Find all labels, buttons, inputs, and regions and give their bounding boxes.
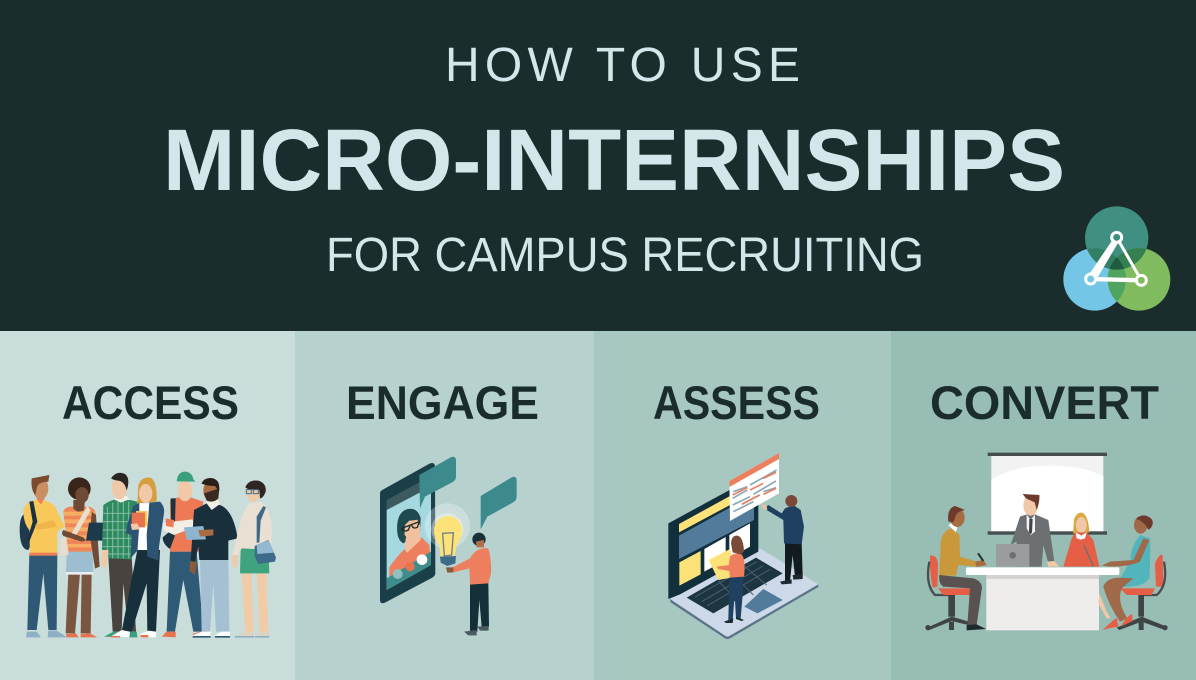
laptop	[668, 474, 818, 639]
subtitle: for campus recruiting: FOR CAMPUS RECRUITING	[326, 229, 924, 282]
student 2	[60, 477, 117, 637]
table	[966, 567, 1119, 630]
man	[446, 533, 491, 635]
projector screen	[988, 453, 1107, 535]
speech bubble right	[481, 477, 517, 529]
presenter	[1011, 494, 1059, 567]
illustration: video call and light bulb	[380, 457, 517, 635]
standing woman	[709, 536, 745, 623]
laptop	[996, 544, 1029, 567]
man in mustard sweater	[925, 506, 987, 630]
logo: three overlapping circles	[1063, 206, 1170, 311]
title: micro-internships: MICRO-INTERNSHIPS	[163, 112, 1065, 209]
light bulb	[425, 503, 470, 566]
student 5	[162, 472, 211, 637]
panel: assess	[594, 331, 891, 680]
student 6	[184, 478, 238, 638]
panel: engage	[295, 331, 594, 680]
floating document	[729, 453, 779, 521]
title line: how to use: HOW TO USE	[445, 39, 800, 92]
panel: convert	[891, 331, 1196, 680]
illustration: meeting room	[925, 453, 1168, 630]
phone	[380, 463, 435, 603]
heading: convert: CONVERT	[930, 376, 1159, 429]
student 4	[111, 478, 164, 637]
illustration: laptop and people	[668, 453, 818, 639]
student 3	[101, 473, 137, 637]
heading: engage: ENGAGE	[346, 376, 539, 429]
header band	[0, 0, 1196, 331]
student 1	[20, 475, 67, 637]
woman in red	[1063, 513, 1099, 567]
speech bubble left	[419, 457, 456, 508]
heading: access: ACCESS	[62, 376, 239, 429]
heading: assess: ASSESS	[653, 376, 820, 429]
panel: access	[0, 331, 295, 680]
student 7	[232, 480, 276, 638]
woman in teal dress	[1098, 515, 1168, 630]
illustration: group of students	[20, 472, 276, 638]
standing man	[762, 495, 804, 584]
